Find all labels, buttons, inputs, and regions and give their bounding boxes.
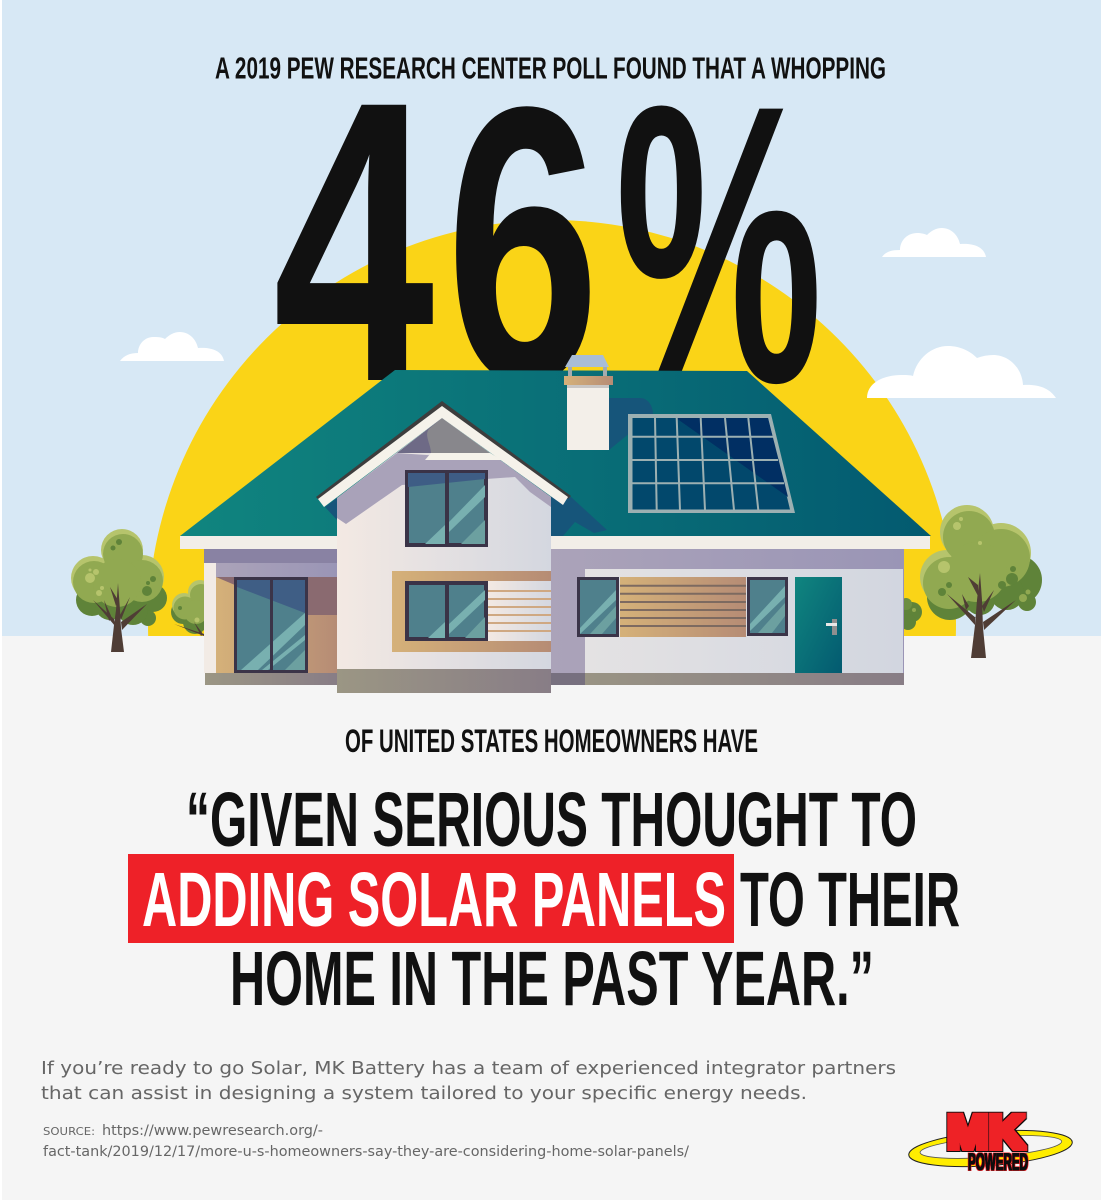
door	[795, 577, 842, 673]
quote line 2 end: TO THEIR	[740, 857, 960, 943]
highlighted words: ADDING SOLAR PANELS	[142, 857, 726, 943]
body text	[41, 1058, 896, 1104]
body text: If you’re ready to go Solar, MK Battery has a team of experienced integrator partners	[41, 1058, 896, 1079]
tree: left	[71, 529, 167, 652]
tree: small bush left	[171, 580, 212, 636]
logo ring	[907, 1125, 1074, 1172]
sun	[148, 220, 956, 636]
tan panel with slats	[392, 571, 551, 652]
subheading: OF UNITED STATES HOMEOWNERS HAVE	[345, 723, 758, 759]
window: upper	[407, 472, 486, 545]
wood cladding	[620, 577, 746, 637]
cloud: left	[120, 332, 224, 361]
left wing	[204, 549, 337, 685]
solar panel	[628, 414, 795, 513]
window: lower	[407, 583, 486, 639]
cloud: top right	[882, 228, 986, 257]
quote	[128, 777, 960, 1022]
right wing	[551, 549, 904, 685]
logo: MK Powered	[907, 1106, 1074, 1176]
roof shadows	[325, 398, 653, 536]
body text: that can assist in designing a system tailored to your specific energy needs.	[41, 1083, 807, 1104]
source: fact-tank/2019/12/17/more-u-s-homeowners-say-they-are-considering-home-solar-panels/	[43, 1144, 689, 1160]
big statistic: 46%	[273, 19, 823, 466]
house	[180, 355, 931, 693]
source	[43, 1123, 689, 1160]
eave	[180, 536, 930, 549]
chimney	[564, 355, 613, 450]
main centre block	[316, 401, 571, 693]
logo: MK Powered: POWERED	[968, 1149, 1028, 1176]
logo MK: MK	[947, 1106, 1025, 1160]
big statistic: 46%: %	[615, 23, 823, 465]
background: ground	[2, 636, 1101, 1200]
background: sky	[2, 0, 1101, 636]
cloud: large right	[867, 346, 1056, 398]
tree: right	[920, 505, 1042, 658]
big statistic: 46%: 4	[273, 19, 436, 466]
big statistic: 46%: 6	[446, 25, 600, 463]
highlight box	[128, 854, 734, 943]
source: SOURCE:	[43, 1125, 95, 1138]
roof	[180, 370, 931, 536]
window: left wing	[236, 578, 306, 672]
window: right wing left	[578, 578, 618, 636]
tree: small bush right	[900, 598, 922, 630]
gable trim	[316, 401, 571, 507]
window: right wing right	[748, 578, 786, 634]
source: https://www.pewresearch.org/-	[102, 1123, 323, 1139]
